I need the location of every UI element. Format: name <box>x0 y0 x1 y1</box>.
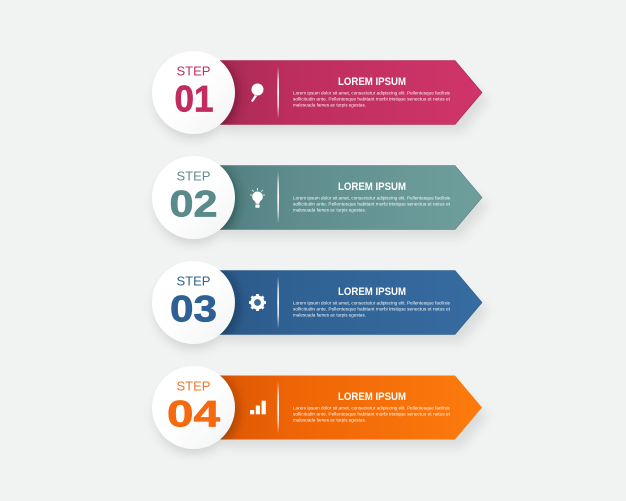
step label: STEP <box>176 274 210 288</box>
circle drop shadow <box>154 60 234 140</box>
divider <box>277 382 279 434</box>
step number: 02 <box>170 184 218 224</box>
body text: malesuada fames ac turpis egestas. <box>293 208 366 212</box>
body text <box>293 406 451 422</box>
step label: STEP <box>176 168 210 184</box>
body text <box>293 196 451 212</box>
step circle <box>152 261 235 344</box>
heading: LOREM IPSUM <box>338 286 406 298</box>
body text: Lorem ipsum dolor sit amet, consectetur adipiscing elit. Pellentesque facilisis <box>293 90 451 96</box>
step number: 03 <box>170 288 217 330</box>
icon: bar chart <box>250 401 266 414</box>
body text <box>293 90 451 108</box>
step label: STEP <box>176 378 210 394</box>
divider <box>277 66 279 118</box>
icon: magnifier <box>251 84 264 102</box>
band shadow <box>225 74 488 132</box>
heading: LOREM IPSUM <box>338 76 406 88</box>
arrow band <box>215 270 482 334</box>
body text: sollicitudin ante. Pellentesque habitant morbi tristique senectus et netus et <box>293 306 451 312</box>
divider <box>277 172 279 224</box>
circle drop shadow <box>154 374 234 454</box>
circle shadow on band <box>220 376 243 440</box>
icon: gear <box>249 294 266 311</box>
circle drop shadow <box>154 270 234 350</box>
circle drop shadow <box>154 164 234 244</box>
step 3 row <box>152 261 488 350</box>
arrow band <box>215 376 482 440</box>
body text: Lorem ipsum dolor sit amet, consectetur adipiscing elit. Pellentesque facilisis <box>293 406 451 410</box>
heading: LOREM IPSUM <box>338 391 406 403</box>
body text: Lorem ipsum dolor sit amet, consectetur adipiscing elit. Pellentesque facilisis <box>293 300 451 306</box>
circle shadow on band <box>220 270 243 334</box>
arrow band <box>215 166 482 230</box>
body text: sollicitudin ante. Pellentesque habitant morbi tristique senectus et netus et <box>293 202 451 206</box>
step circle <box>152 156 235 239</box>
step 2 row <box>152 156 488 244</box>
body text: sollicitudin ante. Pellentesque habitant morbi tristique senectus et netus et <box>293 96 451 102</box>
divider <box>277 276 279 328</box>
band shadow <box>225 284 488 342</box>
step circle <box>152 51 235 134</box>
body text: malesuada fames ac turpis egestas. <box>293 418 366 422</box>
body text: malesuada fames ac turpis egestas. <box>293 312 366 318</box>
body text: sollicitudin ante. Pellentesque habitant morbi tristique senectus et netus et <box>293 412 451 416</box>
body text <box>293 300 451 318</box>
body text: Lorem ipsum dolor sit amet, consectetur adipiscing elit. Pellentesque facilisis <box>293 196 451 200</box>
heading: LOREM IPSUM <box>338 181 406 193</box>
step number: 04 <box>167 394 221 434</box>
arrow band <box>215 60 482 124</box>
step number: 01 <box>174 78 214 120</box>
icon: light bulb <box>250 188 265 208</box>
step 1 row <box>152 51 488 140</box>
circle shadow on band <box>220 60 242 124</box>
circle shadow on band <box>220 166 242 230</box>
step 4 row <box>152 366 488 454</box>
body text: malesuada fames ac turpis egestas. <box>293 102 366 108</box>
step circle <box>152 366 235 449</box>
band shadow <box>225 180 488 238</box>
step label: STEP <box>176 64 210 78</box>
band shadow <box>225 390 488 448</box>
